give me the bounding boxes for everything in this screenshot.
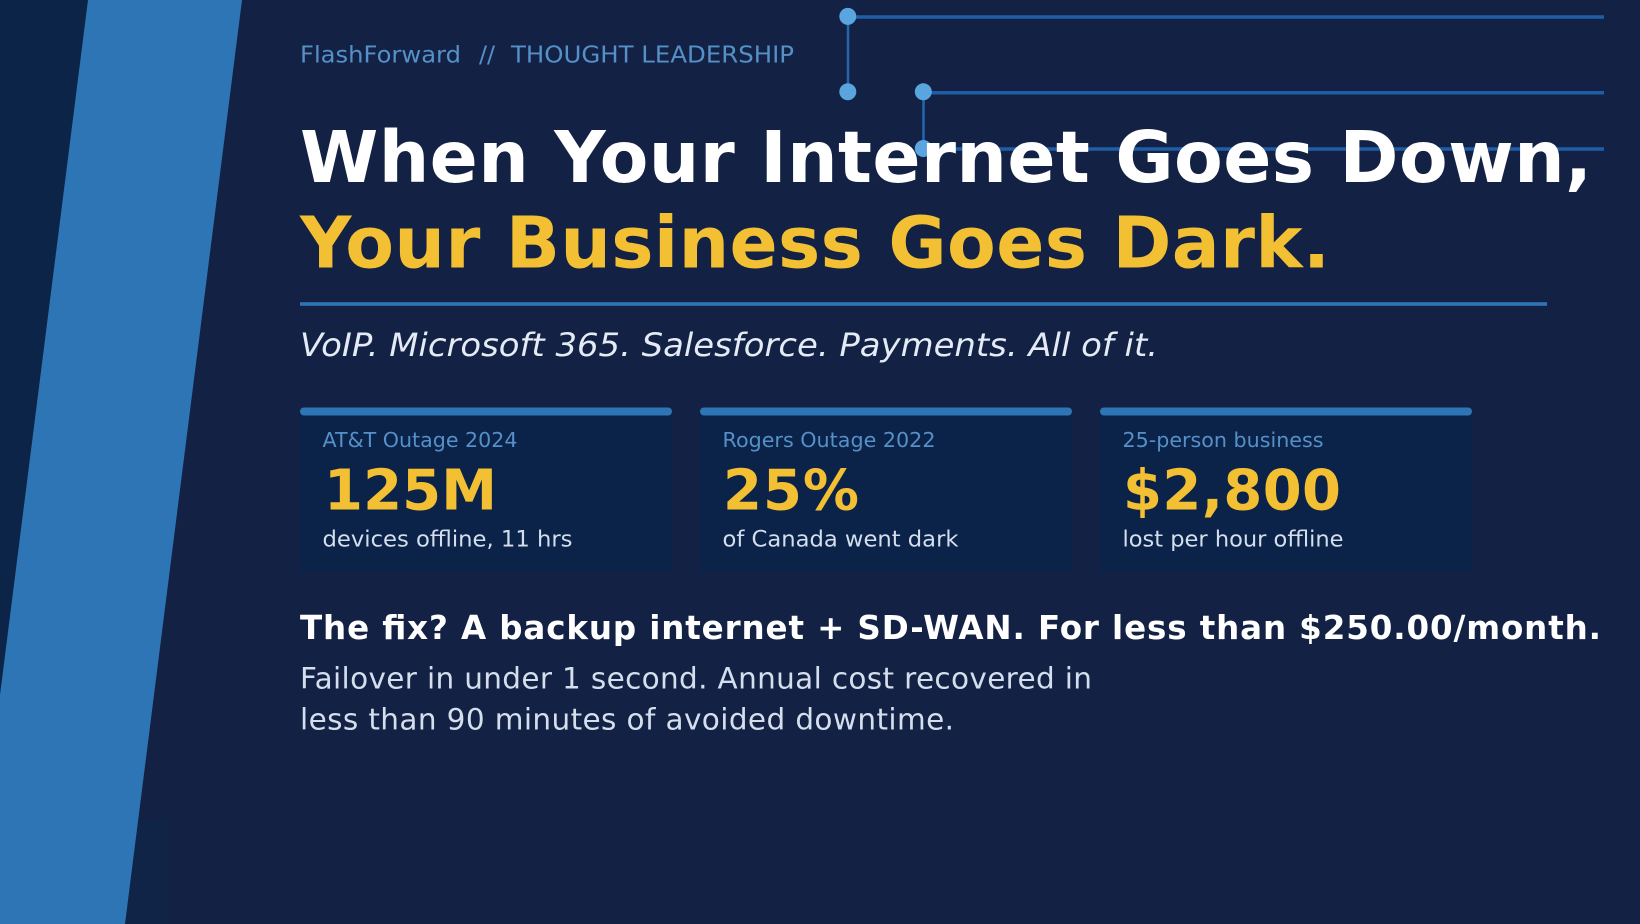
stat card: AT&T outage — [300, 408, 672, 572]
title: Your Business Goes Dark. — [299, 202, 1330, 285]
supporting text — [300, 662, 1092, 736]
stat card: 25-person business: lost per hour offline — [1122, 528, 1344, 552]
stat card: AT&T outage: devices offline, 11 hrs — [322, 528, 572, 552]
circuit lines decoration — [839, 8, 1604, 157]
left dark background strip — [0, 0, 167, 924]
supporting text: Failover in under 1 second. Annual cost recovered in — [300, 662, 1092, 696]
stat card: Rogers outage: of Canada went dark — [722, 528, 959, 552]
title — [299, 116, 1592, 285]
subtitle: VoIP. Microsoft 365. Salesforce. Payments. All of it. — [300, 326, 1158, 364]
title: When Your Internet Goes Down, — [300, 116, 1592, 199]
eyebrow: brand and category: FlashForward — [300, 42, 461, 68]
eyebrow: brand and category: THOUGHT LEADERSHIP — [510, 42, 794, 68]
stat card: 25-person business: 25-person business — [1122, 428, 1324, 452]
title rule — [300, 302, 1547, 306]
stat card: AT&T outage: AT&T Outage 2024 — [322, 428, 518, 452]
stat card: 25-person business — [1100, 408, 1472, 572]
stat card: 25-person business: $2,800 — [1123, 458, 1341, 524]
stat card: Rogers outage — [700, 408, 1072, 572]
stat card: Rogers outage: Rogers Outage 2022 — [722, 428, 936, 452]
diagonal blue band — [0, 0, 242, 924]
supporting text: less than 90 minutes of avoided downtime. — [300, 702, 954, 736]
stat card: Rogers outage: 25% — [723, 458, 859, 524]
call to action headline: The fix? A backup internet + SD-WAN. For less than $250.00/month. — [300, 609, 1601, 647]
eyebrow: brand and category: // — [479, 42, 495, 68]
eyebrow: brand and category — [300, 42, 794, 68]
stat card: AT&T outage: 125M — [324, 458, 497, 524]
